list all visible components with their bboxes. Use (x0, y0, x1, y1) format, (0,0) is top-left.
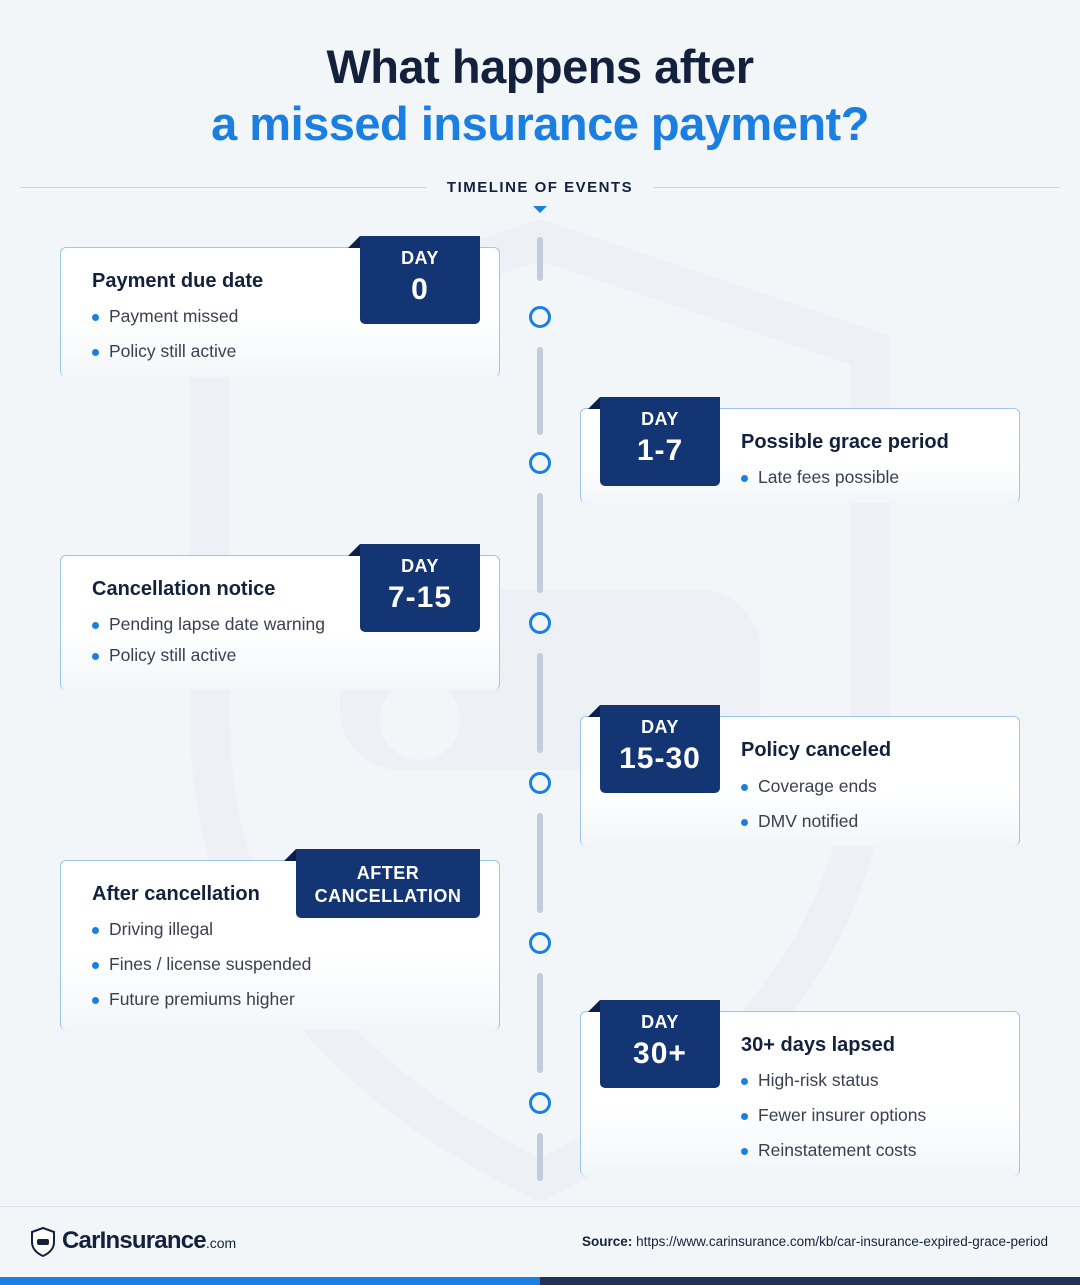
background watermark shield (190, 220, 890, 1200)
card: day 1-7 (580, 408, 1020, 503)
arrow marker (533, 206, 547, 213)
card: day 15-30: DMV notified (758, 811, 858, 831)
logo: CarInsurance.com (62, 1227, 236, 1254)
card: after cancellation: Fines / license suspended (109, 954, 311, 974)
card: day 1-7: 1-7 (637, 434, 683, 467)
card: after cancellation (60, 860, 500, 1030)
card: day 30+: Fewer insurer options (758, 1105, 926, 1125)
card: day 15-30: Coverage ends (758, 776, 877, 796)
card: day 1-7: Possible grace period (741, 431, 949, 453)
subtitle: timeline of events: TIMELINE OF EVENTS (447, 179, 633, 196)
card: after cancellation: AFTER (357, 863, 419, 883)
card: day 0: Policy still active (109, 341, 236, 361)
bottom bar (0, 1277, 1080, 1285)
source: Source: https://www.carinsurance.com/kb/car-insurance-expired-grace-period (582, 1234, 1048, 1249)
card: day 15-30 (580, 716, 1020, 846)
card: day 7-15: 7-15 (388, 581, 452, 614)
card: day 7-15: Cancellation notice (92, 578, 275, 600)
card: day 0 (60, 247, 500, 377)
title (211, 40, 869, 150)
card: after cancellation: Future premiums higher (109, 989, 295, 1009)
card: day 0: Payment missed (109, 306, 238, 326)
card: day 0: 0 (411, 273, 429, 306)
card: day 7-15: DAY (401, 556, 439, 576)
title: What happens after (326, 40, 754, 93)
card: day 0: Payment due date (92, 270, 263, 292)
card: day 15-30: Policy canceled (741, 739, 891, 761)
card: day 30+: 30+ days lapsed (741, 1034, 895, 1056)
card: day 7-15 (60, 555, 500, 690)
footer divider (0, 1206, 1080, 1207)
card: day 30+: DAY (641, 1012, 679, 1032)
card: day 1-7: DAY (641, 409, 679, 429)
card: day 30+: Reinstatement costs (758, 1140, 917, 1160)
card: after cancellation: Driving illegal (109, 919, 213, 939)
card: day 15-30: DAY (641, 717, 679, 737)
card: day 7-15: Pending lapse date warning (109, 614, 325, 634)
card: day 7-15: Policy still active (109, 645, 236, 665)
title: a missed insurance payment? (211, 97, 869, 150)
card: day 30+: High-risk status (758, 1070, 879, 1090)
card: day 30+: 30+ (633, 1037, 687, 1070)
card: day 30+ (580, 1011, 1020, 1176)
timeline (537, 237, 543, 1181)
card: day 1-7: Late fees possible (758, 467, 899, 487)
card: after cancellation: CANCELLATION (315, 886, 461, 906)
card: day 0: DAY (401, 248, 439, 268)
card: after cancellation: After cancellation (92, 883, 260, 905)
card: day 15-30: 15-30 (619, 742, 701, 775)
